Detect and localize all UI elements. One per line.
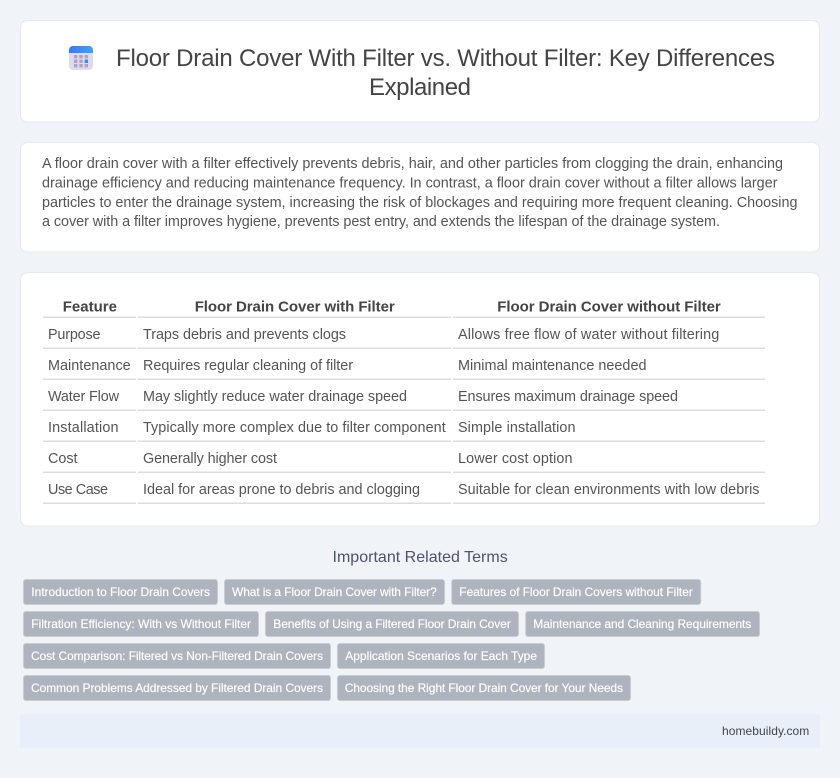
- table row: purpose: Purpose: [48, 327, 100, 343]
- heading: important related terms: Important Related Terms: [332, 549, 508, 566]
- tag: [24, 644, 330, 668]
- table row: use case: [43, 482, 765, 504]
- table row: purpose: [43, 327, 765, 349]
- tag: [24, 676, 330, 700]
- tag: Common Problems Addressed by Filtered Drain Covers: [31, 681, 323, 695]
- footer: homebuildy.com: [722, 724, 809, 738]
- table row: cost: Generally higher cost: [143, 451, 277, 467]
- tag: [338, 644, 544, 668]
- table header row: Feature: [63, 299, 117, 316]
- table row: installation: Typically more complex due to filter component: [143, 420, 446, 436]
- table header row: Floor Drain Cover without Filter: [497, 299, 721, 316]
- tag: [24, 612, 258, 636]
- table row: cost: [43, 451, 765, 473]
- panel: header card: [20, 20, 820, 122]
- table row: water flow: [43, 389, 765, 411]
- panel: comparison table: [20, 272, 820, 526]
- tag: [224, 580, 444, 604]
- table row: use case: Suitable for clean environments with low debris: [458, 482, 760, 498]
- tag: [452, 580, 701, 604]
- tag list: related terms: [24, 580, 760, 700]
- table row: installation: Simple installation: [458, 420, 576, 436]
- title: [116, 45, 775, 101]
- tag: [526, 612, 760, 636]
- table row: maintenance: Requires regular cleaning of filter: [143, 358, 353, 374]
- table row: maintenance: Maintenance: [48, 358, 131, 374]
- table row: water flow: May slightly reduce water drainage speed: [143, 389, 407, 405]
- table row: maintenance: Minimal maintenance needed: [458, 358, 646, 374]
- tag: Filtration Efficiency: With vs Without Filter: [31, 617, 251, 631]
- table row: cost: Lower cost option: [458, 451, 572, 467]
- table row: water flow: Water Flow: [48, 389, 120, 405]
- table row: water flow: Ensures maximum drainage speed: [458, 389, 678, 405]
- tag: Maintenance and Cleaning Requirements: [533, 617, 751, 631]
- footer: [20, 714, 820, 748]
- table row: installation: Installation: [48, 420, 118, 436]
- panel: introduction: [20, 142, 820, 252]
- table header row: [43, 299, 765, 318]
- text block: introduction paragraph: [42, 156, 798, 230]
- tag: [338, 676, 630, 700]
- title: Explained: [369, 74, 471, 101]
- tag: [24, 580, 218, 604]
- icon: calendar: [69, 46, 93, 70]
- text block: introduction paragraph: drainage efficiency and reducing maintenance frequency. In contrast, a floor drain cover without a filter allows larger: [42, 175, 778, 191]
- table row: purpose: Traps debris and prevents clogs: [143, 327, 346, 343]
- table row: installation: [43, 420, 765, 442]
- table row: use case: Ideal for areas prone to debris and clogging: [143, 482, 420, 498]
- tag: [266, 612, 518, 636]
- table row: use case: Use Case: [48, 482, 108, 498]
- tag: Application Scenarios for Each Type: [345, 649, 537, 663]
- table row: cost: Cost: [48, 451, 78, 467]
- table row: maintenance: [43, 358, 765, 380]
- tag: Cost Comparison: Filtered vs Non-Filtered Drain Covers: [31, 649, 323, 663]
- text block: introduction paragraph: a cover with a filter improves hygiene, prevents pest entry, and extends the lifespan of the drainage system.: [42, 214, 720, 230]
- title: Floor Drain Cover With Filter vs. Without Filter: Key Differences: [116, 45, 775, 72]
- text block: introduction paragraph: A floor drain cover with a filter effectively prevents debris, hair, and other particles from clogging the drain, enhancing: [42, 156, 783, 172]
- table row: purpose: Allows free flow of water without filtering: [458, 327, 719, 343]
- tag: What is a Floor Drain Cover with Filter?: [232, 585, 437, 599]
- tag: Choosing the Right Floor Drain Cover for Your Needs: [345, 681, 623, 695]
- text block: introduction paragraph: particles to enter the drainage system, increasing the risk of blockages and requiring more frequent cleaning. Choosing: [42, 195, 798, 211]
- tag: Features of Floor Drain Covers without Filter: [459, 585, 693, 599]
- tag: Benefits of Using a Filtered Floor Drain Cover: [273, 617, 511, 631]
- tag: Introduction to Floor Drain Covers: [31, 585, 210, 599]
- table header row: Floor Drain Cover with Filter: [195, 299, 395, 316]
